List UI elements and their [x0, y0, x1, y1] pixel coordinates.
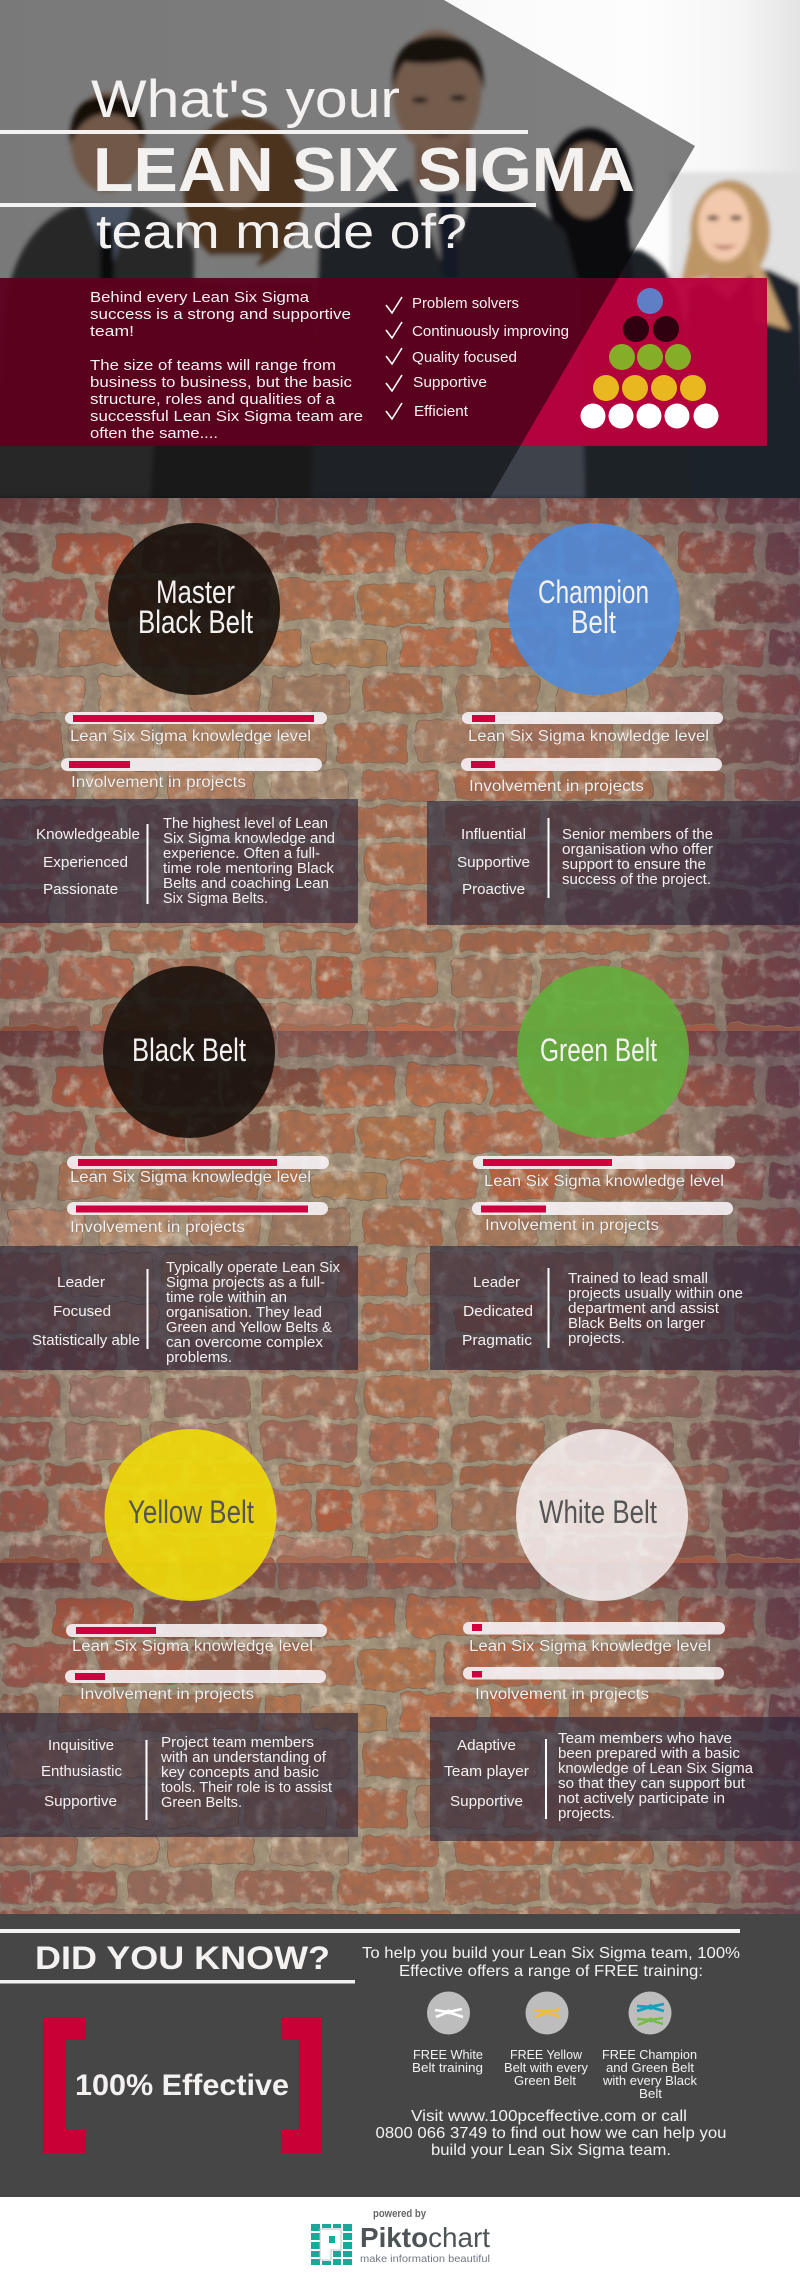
icon: champion and green belts	[628, 1992, 672, 2034]
description box: Leader	[473, 1275, 520, 1291]
description box: Pragmatic	[462, 1333, 532, 1349]
brick wall background	[0, 498, 800, 1914]
heading: did you know	[0, 1929, 740, 1984]
involvement label: Involvement in projects	[469, 778, 644, 795]
description box: The highest level of Lean	[163, 816, 328, 832]
panel: White Belt	[430, 1429, 800, 1841]
belt name	[538, 574, 649, 640]
description box	[430, 1246, 800, 1370]
description box: projects usually within one	[568, 1286, 743, 1302]
intro text: successful Lean Six Sigma team are	[90, 408, 363, 425]
contact text: 0800 066 3749 to find out how we can help you	[376, 2125, 726, 2142]
label: yellow belt offer	[504, 2048, 589, 2088]
description box: Project team members	[161, 1735, 314, 1751]
panel: Master Black Belt	[0, 523, 358, 923]
involvement label: Involvement in projects	[70, 1219, 245, 1236]
title: What's your	[91, 70, 400, 129]
intro text: business to business, but the basic	[90, 374, 353, 391]
knowledge label: Lean Six Sigma knowledge level	[469, 1638, 711, 1655]
description box	[427, 801, 800, 925]
description box: Six Sigma Belts.	[163, 891, 268, 907]
100% effective logo: 100% Effective	[75, 2069, 289, 2102]
description box: Senior members of the	[562, 827, 713, 843]
belt name: Master	[156, 574, 235, 610]
intro text	[90, 289, 363, 442]
belt name: Green Belt	[540, 1032, 657, 1068]
description box: Knowledgeable	[36, 827, 140, 843]
description box: can overcome complex	[166, 1335, 324, 1351]
tagline: make information beautiful	[360, 2253, 490, 2265]
belt circle	[517, 966, 689, 1138]
intro red band	[0, 278, 767, 446]
description box: Team members who have	[558, 1731, 732, 1747]
description box: Sigma projects as a full-	[166, 1275, 325, 1291]
icon: white belt	[427, 1992, 470, 2034]
wordmark: Piktochart	[360, 2222, 490, 2253]
100% effective logo	[43, 2017, 322, 2153]
label: champion and green belt offer: with every Black	[602, 2074, 698, 2088]
knowledge bar	[462, 712, 723, 724]
description box: Statistically able	[32, 1333, 140, 1349]
involvement label: Involvement in projects	[71, 774, 246, 791]
description box: key concepts and basic	[161, 1765, 319, 1781]
contact text: build your Lean Six Sigma team.	[431, 2142, 671, 2159]
description box: projects.	[558, 1806, 615, 1822]
description box	[0, 799, 358, 923]
description box: Leader	[57, 1275, 105, 1291]
label: champion and green belt offer: FREE Champion	[602, 2048, 697, 2062]
belt name: Black Belt	[132, 1032, 246, 1068]
belt circle	[104, 1429, 276, 1601]
description box: Six Sigma knowledge and	[163, 831, 335, 847]
qualities checklist	[386, 296, 569, 420]
knowledge bar	[66, 1624, 327, 1637]
footer: powered by Piktochart	[0, 2197, 800, 2277]
header photo: business team	[0, 0, 800, 510]
involvement bar	[461, 758, 722, 771]
knowledge label: Lean Six Sigma knowledge level	[70, 728, 311, 745]
description box: Black Belts on larger	[568, 1316, 705, 1332]
description box: time role mentoring Black	[163, 861, 335, 877]
description box: Dedicated	[463, 1304, 533, 1320]
description box: problems.	[166, 1350, 232, 1366]
description box: Inquisitive	[48, 1738, 114, 1754]
qualities checklist: Continuously improving	[412, 324, 569, 340]
qualities checklist: Efficient	[414, 404, 468, 420]
knowledge label: Lean Six Sigma knowledge level	[484, 1173, 724, 1190]
description box: projects.	[568, 1331, 625, 1347]
involvement bar	[67, 1202, 328, 1215]
description box: Green Belts.	[161, 1795, 242, 1811]
belt circle	[108, 523, 280, 695]
description box	[0, 1713, 358, 1837]
panel: Champion Belt	[427, 523, 800, 925]
description box: success of the project.	[562, 872, 711, 888]
description box: experience. Often a full-	[163, 846, 320, 862]
belt name: Black Belt	[138, 604, 253, 640]
label: white belt training: FREE White	[413, 2048, 483, 2062]
knowledge bar	[65, 712, 327, 724]
label: champion and green belt offer: Belt	[639, 2087, 663, 2101]
involvement bar	[472, 1202, 733, 1215]
belt name: Champion	[538, 574, 649, 610]
description box: Typically operate Lean Six	[166, 1260, 341, 1276]
label: yellow belt offer: FREE Yellow	[510, 2048, 583, 2062]
label: white belt training: Belt training	[412, 2061, 483, 2075]
description box: organisation who offer	[562, 842, 713, 858]
involvement bar	[463, 1667, 724, 1680]
description box	[430, 1717, 800, 1841]
involvement bar	[61, 758, 322, 771]
icon: Piktochart logo	[311, 2224, 352, 2265]
qualities checklist: Quality focused	[412, 350, 517, 366]
intro text: team!	[90, 323, 134, 340]
training intro: To help you build your Lean Six Sigma team, 100%	[362, 1945, 740, 1962]
description box: time role within an	[166, 1290, 287, 1306]
description box: Supportive	[44, 1794, 117, 1810]
involvement bar	[65, 1670, 326, 1683]
label: yellow belt offer: Belt with every	[504, 2061, 589, 2075]
description box: Trained to lead small	[568, 1271, 708, 1287]
belt circle	[103, 966, 275, 1138]
description box: department and assist	[568, 1301, 719, 1317]
intro text: Behind every Lean Six Sigma	[90, 289, 310, 306]
heading: did you know: DID YOU KNOW?	[35, 1940, 330, 1976]
description box: Adaptive	[457, 1738, 516, 1754]
knowledge bar	[463, 1622, 725, 1634]
description box: Influential	[461, 827, 526, 843]
description box: Focused	[53, 1304, 111, 1320]
label: champion and green belt offer: and Green Belt	[606, 2061, 695, 2075]
knowledge bar	[67, 1156, 329, 1169]
belt name: Belt	[571, 604, 616, 640]
description box: with an understanding of	[160, 1750, 327, 1766]
belt name: Yellow Belt	[128, 1494, 254, 1530]
intro text: success is a strong and supportive	[90, 306, 351, 323]
intro text: The size of teams will range from	[90, 357, 336, 374]
description box: not actively participate in	[558, 1791, 725, 1807]
panel: did you know	[0, 1914, 800, 2197]
title: LEAN SIX SIGMA	[93, 136, 635, 205]
description box: Supportive	[450, 1794, 523, 1810]
dark arrow overlay	[0, 0, 695, 498]
panel: Green Belt	[430, 966, 800, 1370]
description box: been prepared with a basic	[558, 1746, 740, 1762]
description box: Proactive	[462, 882, 525, 898]
qualities checklist: Problem solvers	[412, 296, 519, 312]
description box: Belts and coaching Lean	[163, 876, 329, 892]
description box: Passionate	[43, 882, 118, 898]
description box: Experienced	[43, 855, 128, 871]
contact text	[376, 2108, 726, 2159]
title: team made of?	[96, 206, 467, 259]
contact text: Visit www.100pceffective.com or call	[411, 2108, 687, 2125]
involvement label: Involvement in projects	[80, 1686, 254, 1703]
belt circle	[516, 1429, 688, 1601]
panel: Black Belt	[0, 966, 358, 1370]
footer: powered by Piktochart: powered by	[373, 2208, 427, 2220]
description box: so that they can support but	[558, 1776, 745, 1792]
title	[0, 70, 635, 259]
label: champion and green belt offer	[602, 2048, 698, 2101]
belt name: White Belt	[539, 1494, 657, 1530]
training intro	[362, 1945, 740, 1980]
training intro: Effective offers a range of FREE training:	[399, 1963, 703, 1980]
description box: Green and Yellow Belts &	[166, 1320, 332, 1336]
knowledge label: Lean Six Sigma knowledge level	[70, 1169, 311, 1186]
knowledge label: Lean Six Sigma knowledge level	[468, 728, 709, 745]
description box: knowledge of Lean Six Sigma	[558, 1761, 754, 1777]
belt name	[138, 574, 253, 640]
knowledge bar	[473, 1156, 735, 1169]
qualities checklist: Supportive	[413, 375, 487, 391]
description box: organisation. They lead	[166, 1305, 322, 1321]
knowledge label: Lean Six Sigma knowledge level	[72, 1638, 313, 1655]
description box: Team player	[444, 1764, 529, 1780]
icon: yellow belt	[526, 1992, 568, 2034]
belt circle	[508, 523, 680, 695]
intro text: structure, roles and qualities of a	[90, 391, 336, 408]
description box	[0, 1246, 358, 1370]
involvement label: Involvement in projects	[485, 1217, 659, 1234]
description box: tools. Their role is to assist	[161, 1780, 332, 1796]
intro text: often the same....	[90, 425, 218, 442]
involvement label: Involvement in projects	[475, 1686, 649, 1703]
label: yellow belt offer: Green Belt	[514, 2074, 577, 2088]
description box: Supportive	[457, 855, 530, 871]
description box: Enthusiastic	[41, 1764, 122, 1780]
icon: belt pyramid	[580, 288, 718, 428]
panel: Yellow Belt	[0, 1429, 358, 1837]
description box: support to ensure the	[562, 857, 706, 873]
label: white belt training	[412, 2048, 483, 2075]
